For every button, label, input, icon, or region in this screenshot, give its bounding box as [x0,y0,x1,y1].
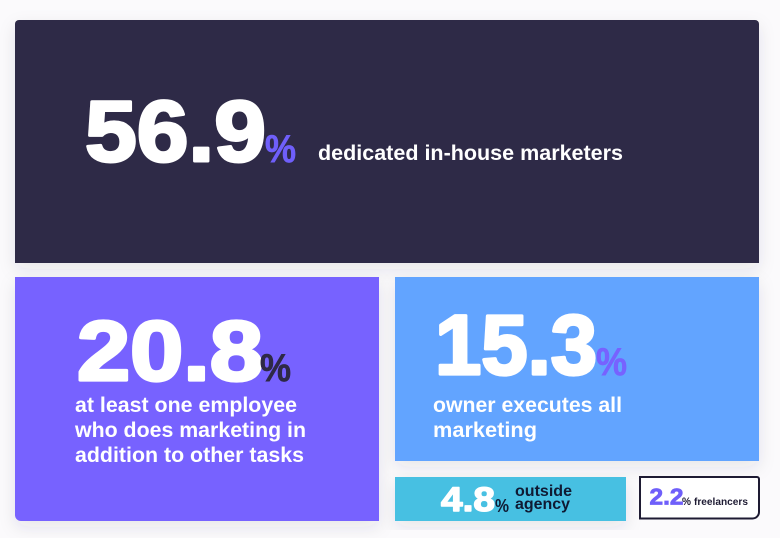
statistic: 2.2: 2.2 [650,484,684,510]
percent sign: % [265,128,296,171]
label: at least one employee [75,394,297,417]
label: dedicated in-house marketers [318,141,623,165]
panel background [15,277,379,521]
panel: outside agency [395,477,626,521]
panel: dedicated in-house marketers [15,20,759,263]
label: freelancers [694,497,748,508]
percent sign: % [596,341,627,384]
statistic: 56.9: 56.9 [85,84,266,180]
panel: owner executes all marketing [395,277,759,461]
label: addition to other tasks [75,444,304,467]
panel: freelancers [640,477,759,518]
label: owner executes all [433,394,622,417]
panel background [640,477,759,518]
label: marketing [433,419,537,442]
label: who does marketing in [74,419,306,442]
label [515,483,572,513]
statistic: 20.8: 20.8 [77,304,263,398]
label [433,394,622,442]
label: agency [515,496,570,513]
panel background [395,477,626,521]
panel: at least one employee [15,277,379,521]
percent sign: % [260,347,291,390]
percent sign: % [495,496,509,516]
percent sign: % [682,496,691,508]
label [74,394,306,467]
panel background [395,277,759,461]
statistic: 4.8: 4.8 [441,481,495,519]
panel background [15,20,759,263]
label: outside [515,483,572,500]
statistic: 15.3: 15.3 [435,298,597,392]
